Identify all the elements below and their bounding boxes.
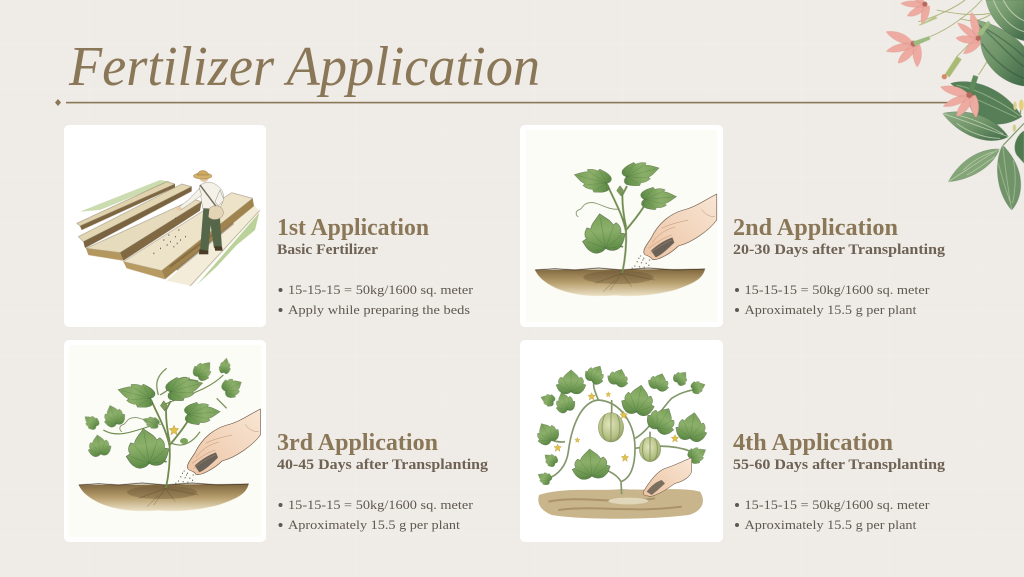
heading: 2nd Application: [733, 215, 898, 241]
illustration: branching vine with hand applying fertilizer: [79, 357, 260, 511]
bullet list: Apply while preparing the beds: [288, 303, 470, 317]
card background: [64, 340, 266, 542]
bullet list: [735, 283, 930, 317]
card background: [520, 125, 723, 327]
botanical corner decoration: [882, 0, 1024, 210]
bullet list: Aproximately 15.5 g per plant: [288, 518, 461, 532]
bullet list: 15-15-15 = 50kg/1600 sq. meter: [288, 498, 474, 512]
heading: 3rd Application: [277, 430, 438, 456]
card background: [520, 340, 723, 542]
illustration: fruiting melon vine with hand applying fertilizer: [531, 361, 710, 519]
bullet list: 15-15-15 = 50kg/1600 sq. meter: [744, 498, 930, 512]
bullet list: Aproximately 15.5 g per plant: [744, 303, 917, 317]
subheading: 55-60 Days after Transplanting: [733, 457, 946, 473]
panel: 2nd application: [520, 125, 946, 327]
bullet list: [278, 283, 474, 317]
bullet list: Aproximately 15.5 g per plant: [744, 518, 917, 532]
subheading: Basic Fertilizer: [277, 242, 378, 258]
card inner tint: [69, 345, 261, 537]
bullet list: [735, 498, 930, 532]
illustration: young plant with hand applying fertilizer: [535, 156, 717, 296]
panel: 3rd application: [64, 340, 489, 542]
card inner tint: [526, 130, 717, 322]
heading: 4th Application: [733, 430, 893, 456]
subheading: 40-45 Days after Transplanting: [277, 457, 489, 473]
illustration: farmer spreading fertilizer on beds: [77, 170, 260, 286]
title rule with diamond: [55, 99, 952, 106]
title: Fertilizer Application: [68, 36, 540, 98]
subheading: 20-30 Days after Transplanting: [733, 242, 946, 258]
heading: 1st Application: [277, 215, 429, 241]
bullet list: [278, 498, 474, 532]
bullet list: 15-15-15 = 50kg/1600 sq. meter: [288, 283, 474, 297]
card background: [64, 125, 266, 327]
panel: 1st application: [64, 125, 474, 327]
panel: 4th application: [520, 340, 946, 542]
bullet list: 15-15-15 = 50kg/1600 sq. meter: [744, 283, 930, 297]
